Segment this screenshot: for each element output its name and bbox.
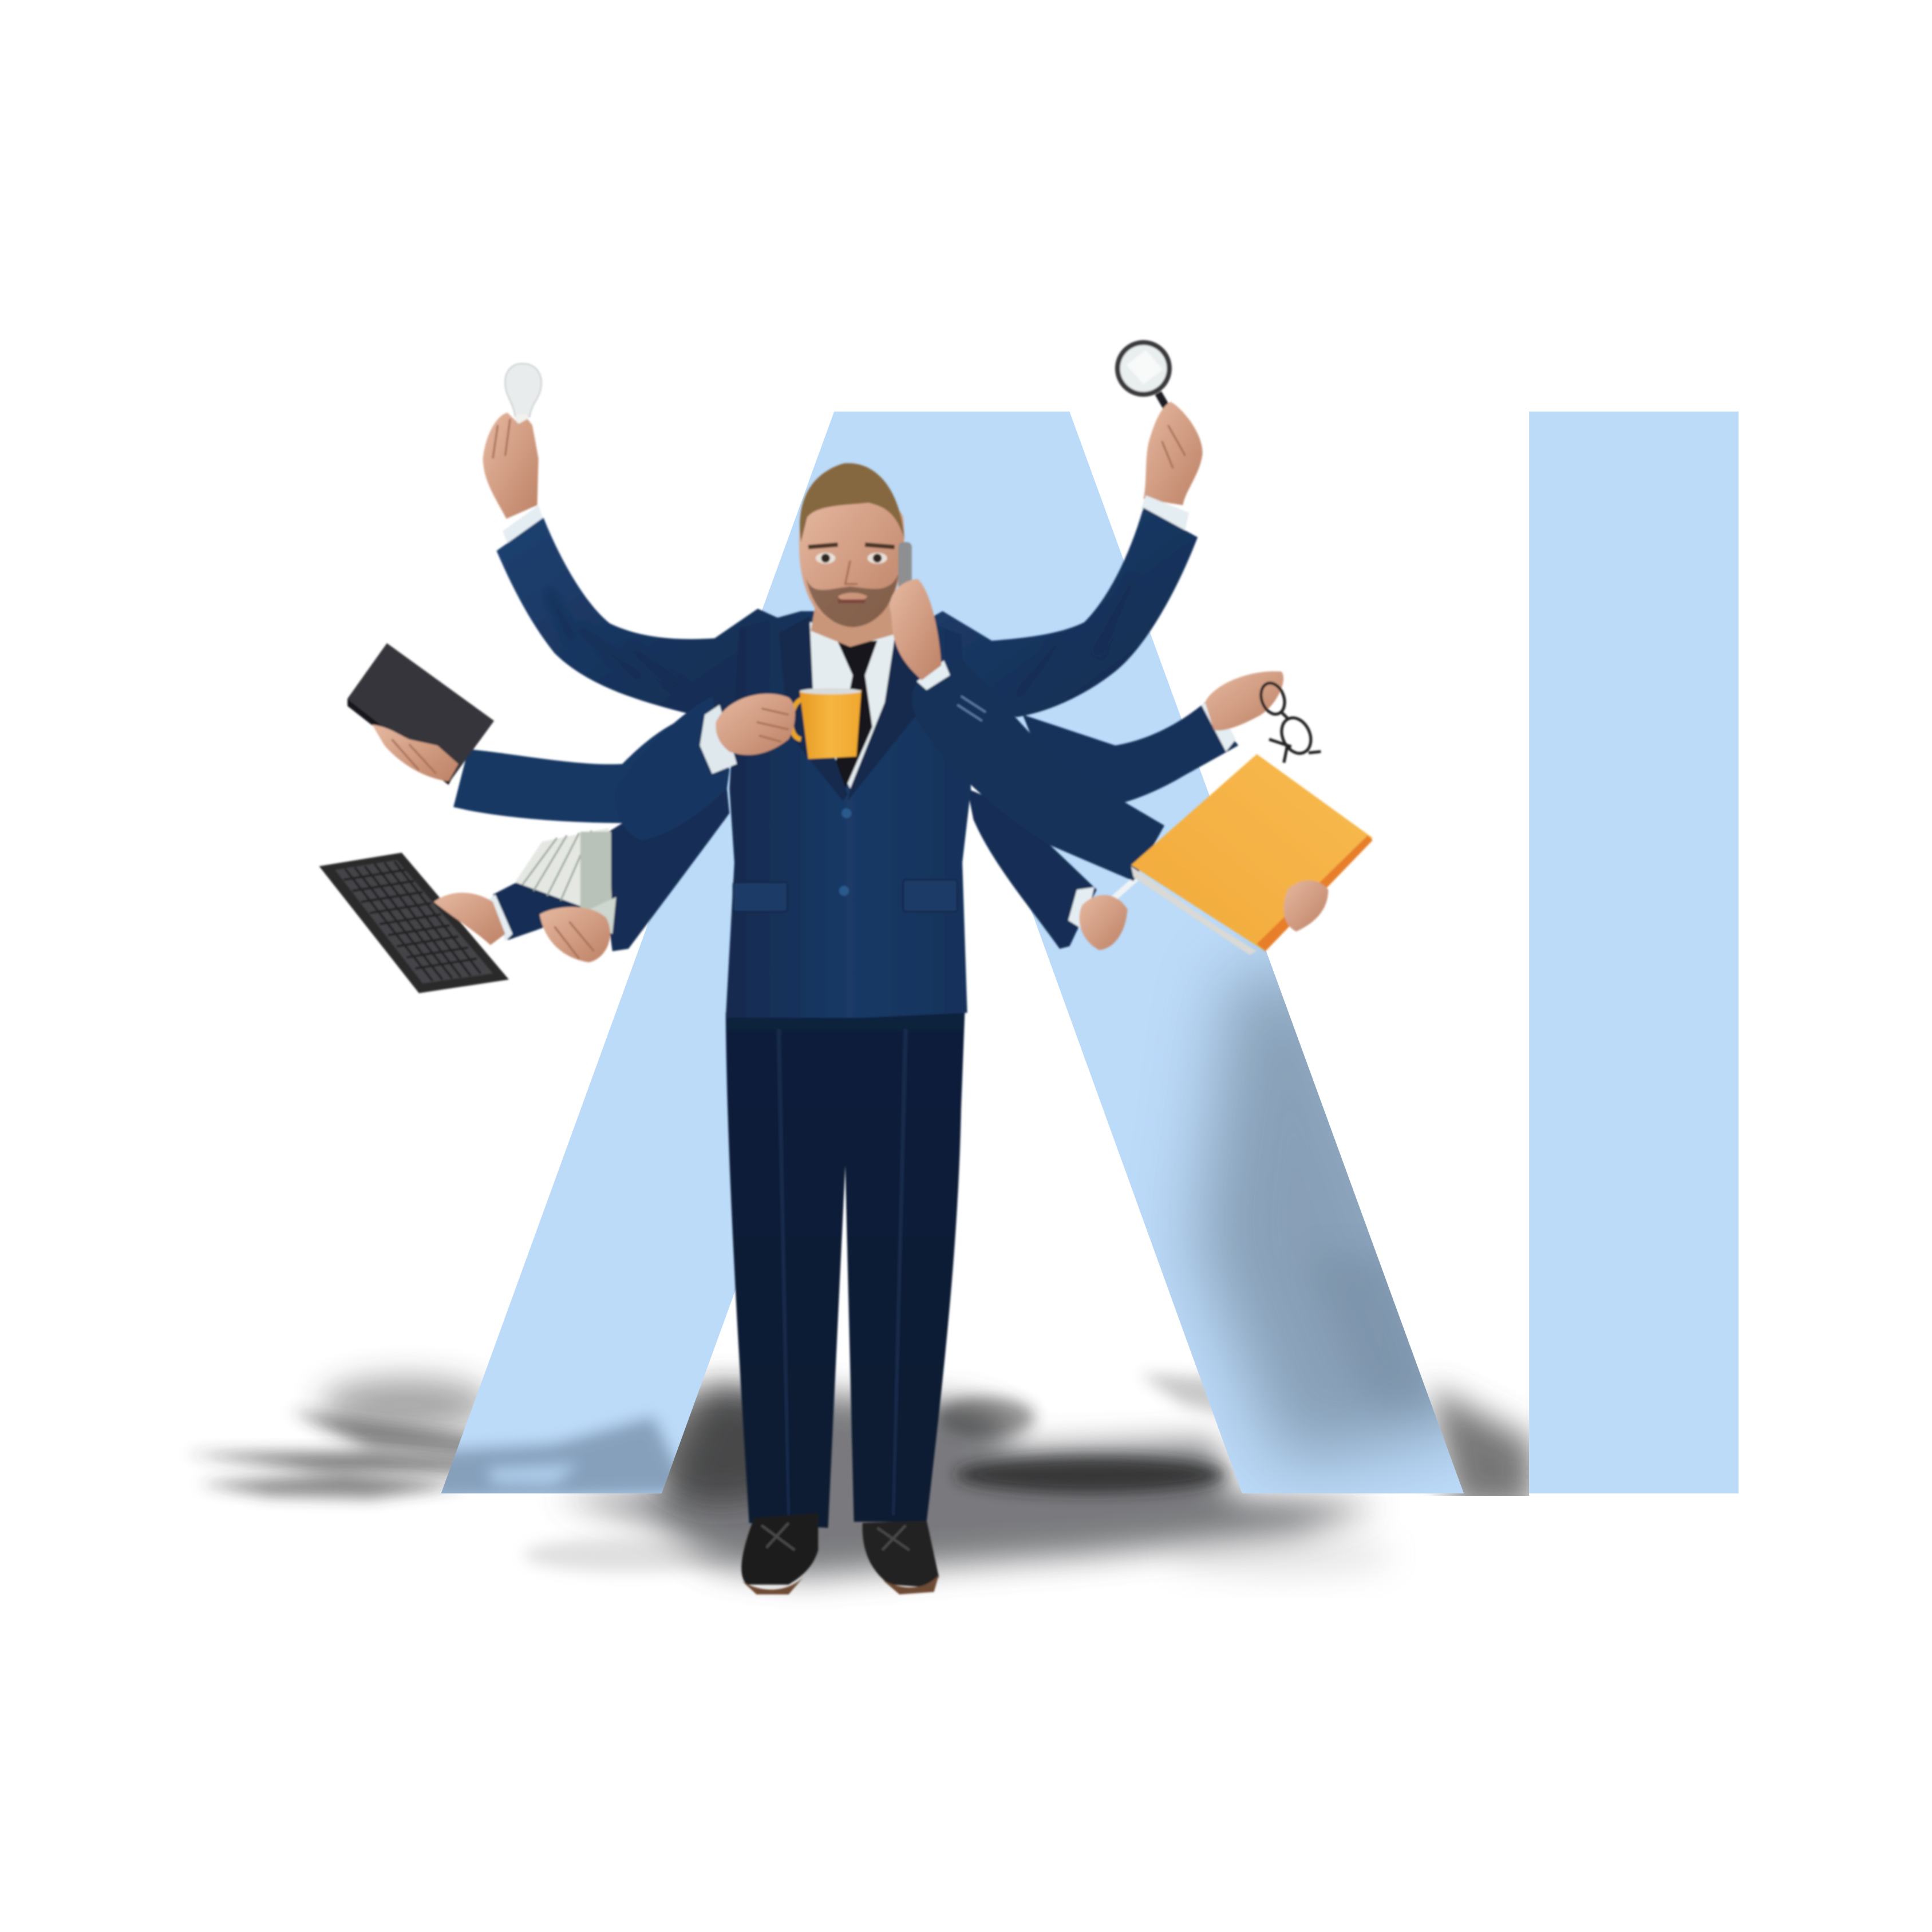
icon: black book [347,643,494,780]
upper right arm holding magnifier [912,342,1203,717]
businessman figure [319,342,1373,1594]
beard [806,574,898,627]
crease lines [779,1029,906,1515]
icon: orange mug [791,688,862,759]
shadow on A left leg [431,1417,690,1498]
middle right arm with glasses [1023,671,1321,807]
orange folder [1131,754,1373,955]
upper left arm holding bulb [483,364,801,721]
phone [898,542,912,634]
jacket torso [726,611,971,1018]
ground shadow [185,1374,1534,1577]
right shoe [863,1520,939,1594]
front right arm on phone [912,659,1164,881]
hand on phone [890,579,941,680]
trousers [726,1013,965,1528]
front left arm with mug [615,688,862,840]
jacket buttons and pockets [733,808,957,912]
icon: pen [1082,879,1136,927]
lower right arm with pen [967,789,1136,950]
letter A [441,412,1464,1494]
icon: keyboard [319,852,509,993]
lower left arm with keyboard [319,789,729,993]
neck [811,604,894,647]
illustration: multitasking businessman in front of AI letters [192,338,1739,1599]
middle left arm holding book [347,643,727,823]
face [799,495,904,626]
shirt and tie [807,622,899,789]
icon: light bulb [505,364,542,431]
lapels [779,616,937,801]
icon: cash fan [515,828,616,934]
shadow on A right leg [1195,973,1491,1466]
brows and eyes [808,544,895,584]
left shoe [741,1513,818,1594]
letter I [1529,412,1739,1494]
head [799,463,941,680]
icon: magnifying glass [1117,342,1177,425]
hair [800,463,904,542]
icon: glasses [1257,680,1321,762]
mouth [838,600,865,602]
